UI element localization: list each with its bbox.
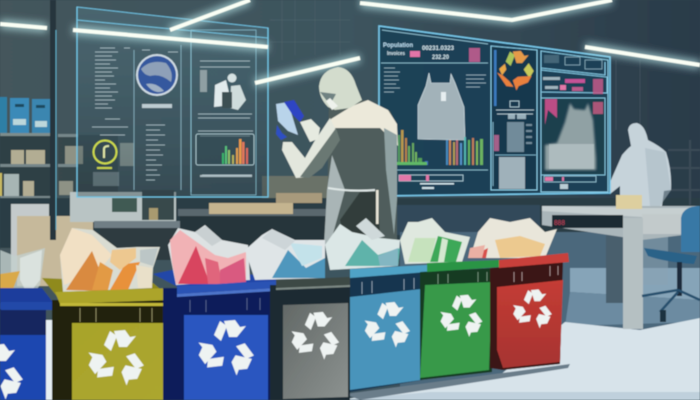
recycling symbol: yellow bin [83, 330, 148, 388]
red bin bags [468, 218, 557, 258]
heading text: right panel: 00231.0323 [422, 45, 454, 52]
illustration: bag graphic [200, 70, 246, 110]
shelving: left wall [0, 97, 134, 199]
progress bar: right panel left [399, 175, 463, 189]
hologram panel: right [379, 26, 610, 196]
far-left blue bin [0, 288, 55, 400]
text lists: right panel [384, 68, 486, 92]
gray bin [270, 277, 350, 400]
recycling symbol: red bin [509, 289, 555, 330]
blue bin opening [153, 270, 276, 287]
blue bin [163, 281, 276, 400]
yellow bin [52, 288, 172, 400]
light-blue bin [350, 265, 427, 392]
sheet of paper [276, 102, 298, 135]
bags in far-left bin [0, 248, 45, 298]
floor [340, 232, 700, 400]
heading text: right panel: Population [383, 42, 413, 49]
blue gloves [284, 100, 304, 122]
illustration: bag on right sub-panel [545, 103, 596, 170]
blue bin bags [168, 225, 250, 285]
desk display strip [552, 215, 623, 228]
recycling symbol: blue bin [193, 320, 258, 378]
desk readout: 888 [554, 220, 565, 227]
small printer icon and figures [493, 101, 536, 189]
worker body gown [324, 100, 397, 245]
wall grid lines [270, 0, 640, 130]
far right shelving [668, 140, 700, 205]
beige shelf boxes [0, 143, 134, 196]
bin shadow on floor [345, 364, 570, 400]
yellow bin opening [42, 278, 171, 300]
recycling symbol: gray bin [287, 312, 342, 362]
blue storage boxes [0, 97, 50, 133]
recycling symbol: far-left bin [0, 344, 27, 400]
sub-panels: right column [541, 52, 607, 189]
heading text: right panel: Invoices [387, 51, 405, 57]
hologram panel: left [77, 7, 268, 197]
icon: earth globe [136, 54, 178, 96]
office chair [642, 206, 700, 322]
bar chart: left panel [196, 134, 254, 165]
bar chart: right panel left [397, 130, 483, 165]
yellow bin bags [60, 228, 160, 292]
ceiling light strips [0, 0, 700, 83]
worker arm [282, 118, 336, 178]
back room: tables and equipment [0, 176, 700, 286]
icon: recycling symbol on screen [497, 51, 534, 90]
heading text: right panel: 232.20 [432, 54, 449, 61]
heading text: right panel [383, 42, 454, 61]
green bin bags [400, 218, 470, 264]
red bin [490, 253, 569, 370]
vertical post [50, 0, 56, 240]
worker hood [319, 67, 362, 110]
green bin [420, 260, 499, 380]
gray bin bags [245, 229, 325, 280]
light-blue bin bags [325, 218, 400, 270]
illustration: plastic bag outline [418, 73, 465, 140]
text lists: left panel [92, 48, 253, 180]
recycling symbol: light-blue bin [360, 302, 413, 350]
desk on right [542, 195, 700, 329]
recycling symbol: green bin [436, 295, 485, 339]
background worker [607, 123, 671, 285]
foreground worker [276, 67, 398, 245]
icon: yellow ring badge [94, 140, 116, 169]
